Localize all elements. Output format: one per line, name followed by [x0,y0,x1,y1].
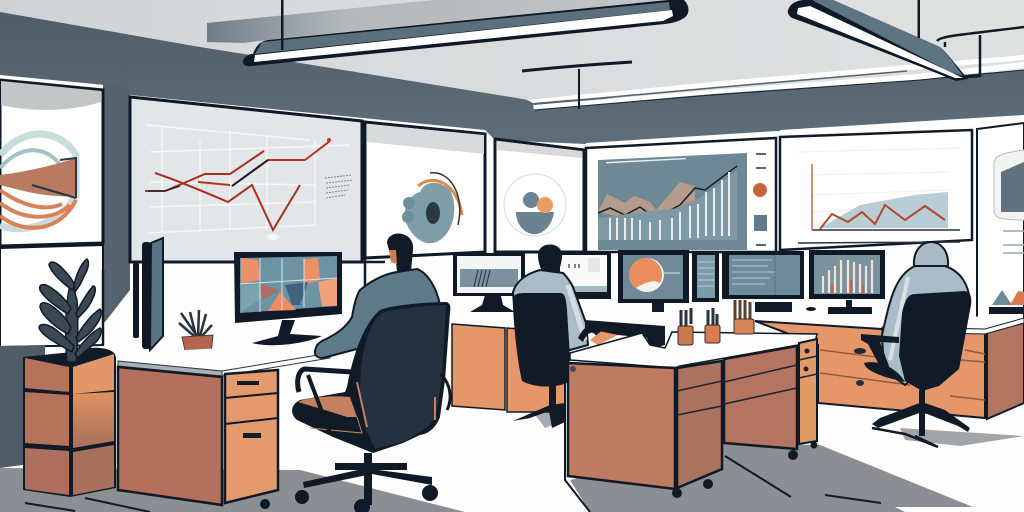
pen cup 1 [678,308,693,345]
panel: area chart poster [586,131,777,252]
desk: back left orange cabinets [450,318,640,412]
panel: gear chart poster [365,122,485,258]
divider wall lines [103,258,385,345]
plant box [23,348,116,497]
monitor: side view tall [133,238,163,350]
monitor: main with abstract chart [234,252,342,345]
ceiling light right [788,0,1024,81]
back desk shelf [470,310,1024,330]
chair: front [292,302,450,512]
desk: front left [25,348,330,512]
monitor: narrow [692,251,719,302]
monitor: bars [809,250,885,314]
small potted plant [179,310,213,355]
monitor: second row B [557,252,611,299]
desk: center [565,332,881,512]
keyboards and back-desk props [585,306,872,349]
desk: back right orange cabinets [755,318,1024,419]
panel: lower left poster [0,245,103,347]
monitor: second row A [453,253,525,312]
ceiling beam [207,0,668,43]
lower left dark wall [0,345,45,468]
panel: mountain line chart poster [780,115,1024,250]
chair: center back [513,293,620,428]
monitor: lines [722,251,804,312]
panel: pie poster [495,139,584,252]
pen cup 2 [705,308,720,343]
person: front analyst [315,233,440,358]
person: right analyst [882,242,970,385]
plant [39,259,101,362]
panel: right edge poster [977,123,1024,320]
chair: right [861,291,971,447]
monitor: pie chart [618,250,689,312]
ceiling light left [243,0,688,66]
panel: line chart board [130,97,362,262]
pen cup 3 [734,300,754,334]
panel: left swirl poster [0,80,103,246]
person: center analyst [513,244,588,350]
ceiling strip light [522,55,1024,110]
